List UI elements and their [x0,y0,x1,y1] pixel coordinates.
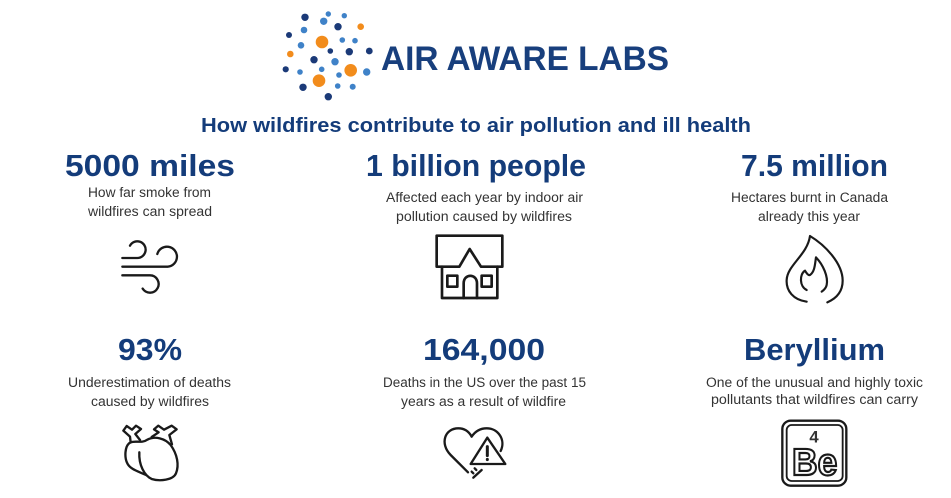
icon: beryllium element tile: 4 [809,427,819,446]
description: toxic pollutants: One of the unusual and highly toxic [706,375,923,390]
description: smoke spread: How far smoke from [88,185,211,200]
stat heading: Beryllium: Beryllium [744,333,885,367]
description: toxic pollutants [706,375,923,407]
description: US deaths: Deaths in the US over the past 15 [383,375,586,390]
description: toxic pollutants: pollutants that wildfires can carry [711,392,918,407]
description: hectares burnt [731,190,888,224]
description: indoor air pollution [386,190,584,224]
panel: 1 billion people [366,149,586,298]
logo wordmark: AIR AWARE LABS [381,40,669,78]
icon: heart with warning triangle [445,428,505,478]
stat heading: 5000 miles: 5000 miles [65,149,235,183]
stat heading: 164,000: 164,000 [423,333,545,367]
description: smoke spread: wildfires can spread [87,204,212,219]
icon: flame [787,236,843,302]
icon: anatomical heart [123,426,178,480]
panel: 7.5 million [731,149,888,302]
panel: 164,000 [383,333,586,478]
icon: house [437,236,502,298]
stat heading: 93%: 93% [118,333,182,367]
description: underestimation of deaths [68,375,231,409]
description: hectares burnt: already this year [758,209,861,224]
stat heading: 7.5 million: 7.5 million [741,149,888,183]
panel: 93% [68,333,231,480]
stat heading: 1 billion people: 1 billion people [366,149,586,183]
description: indoor air pollution: Affected each year by indoor air [386,190,584,205]
title: How wildfires contribute to air pollution and ill health [201,114,751,137]
description: underestimation of deaths: Underestimation of deaths [68,375,231,390]
panel: 5000 miles [65,149,235,293]
icon: beryllium element tile: Be [792,442,837,484]
description: US deaths: years as a result of wildfire [401,394,566,409]
icon: wind [122,241,177,293]
panel: Beryllium [706,333,923,486]
description: underestimation of deaths: caused by wildfires [91,394,209,409]
description: hectares burnt: Hectares burnt in Canada [731,190,888,205]
logo dot cluster [283,11,373,100]
icon: beryllium element tile [782,421,846,486]
logo: Air Aware Labs [283,11,669,100]
description: smoke spread [87,185,212,219]
description: indoor air pollution: pollution caused by wildfires [396,209,572,224]
description: US deaths [383,375,586,409]
